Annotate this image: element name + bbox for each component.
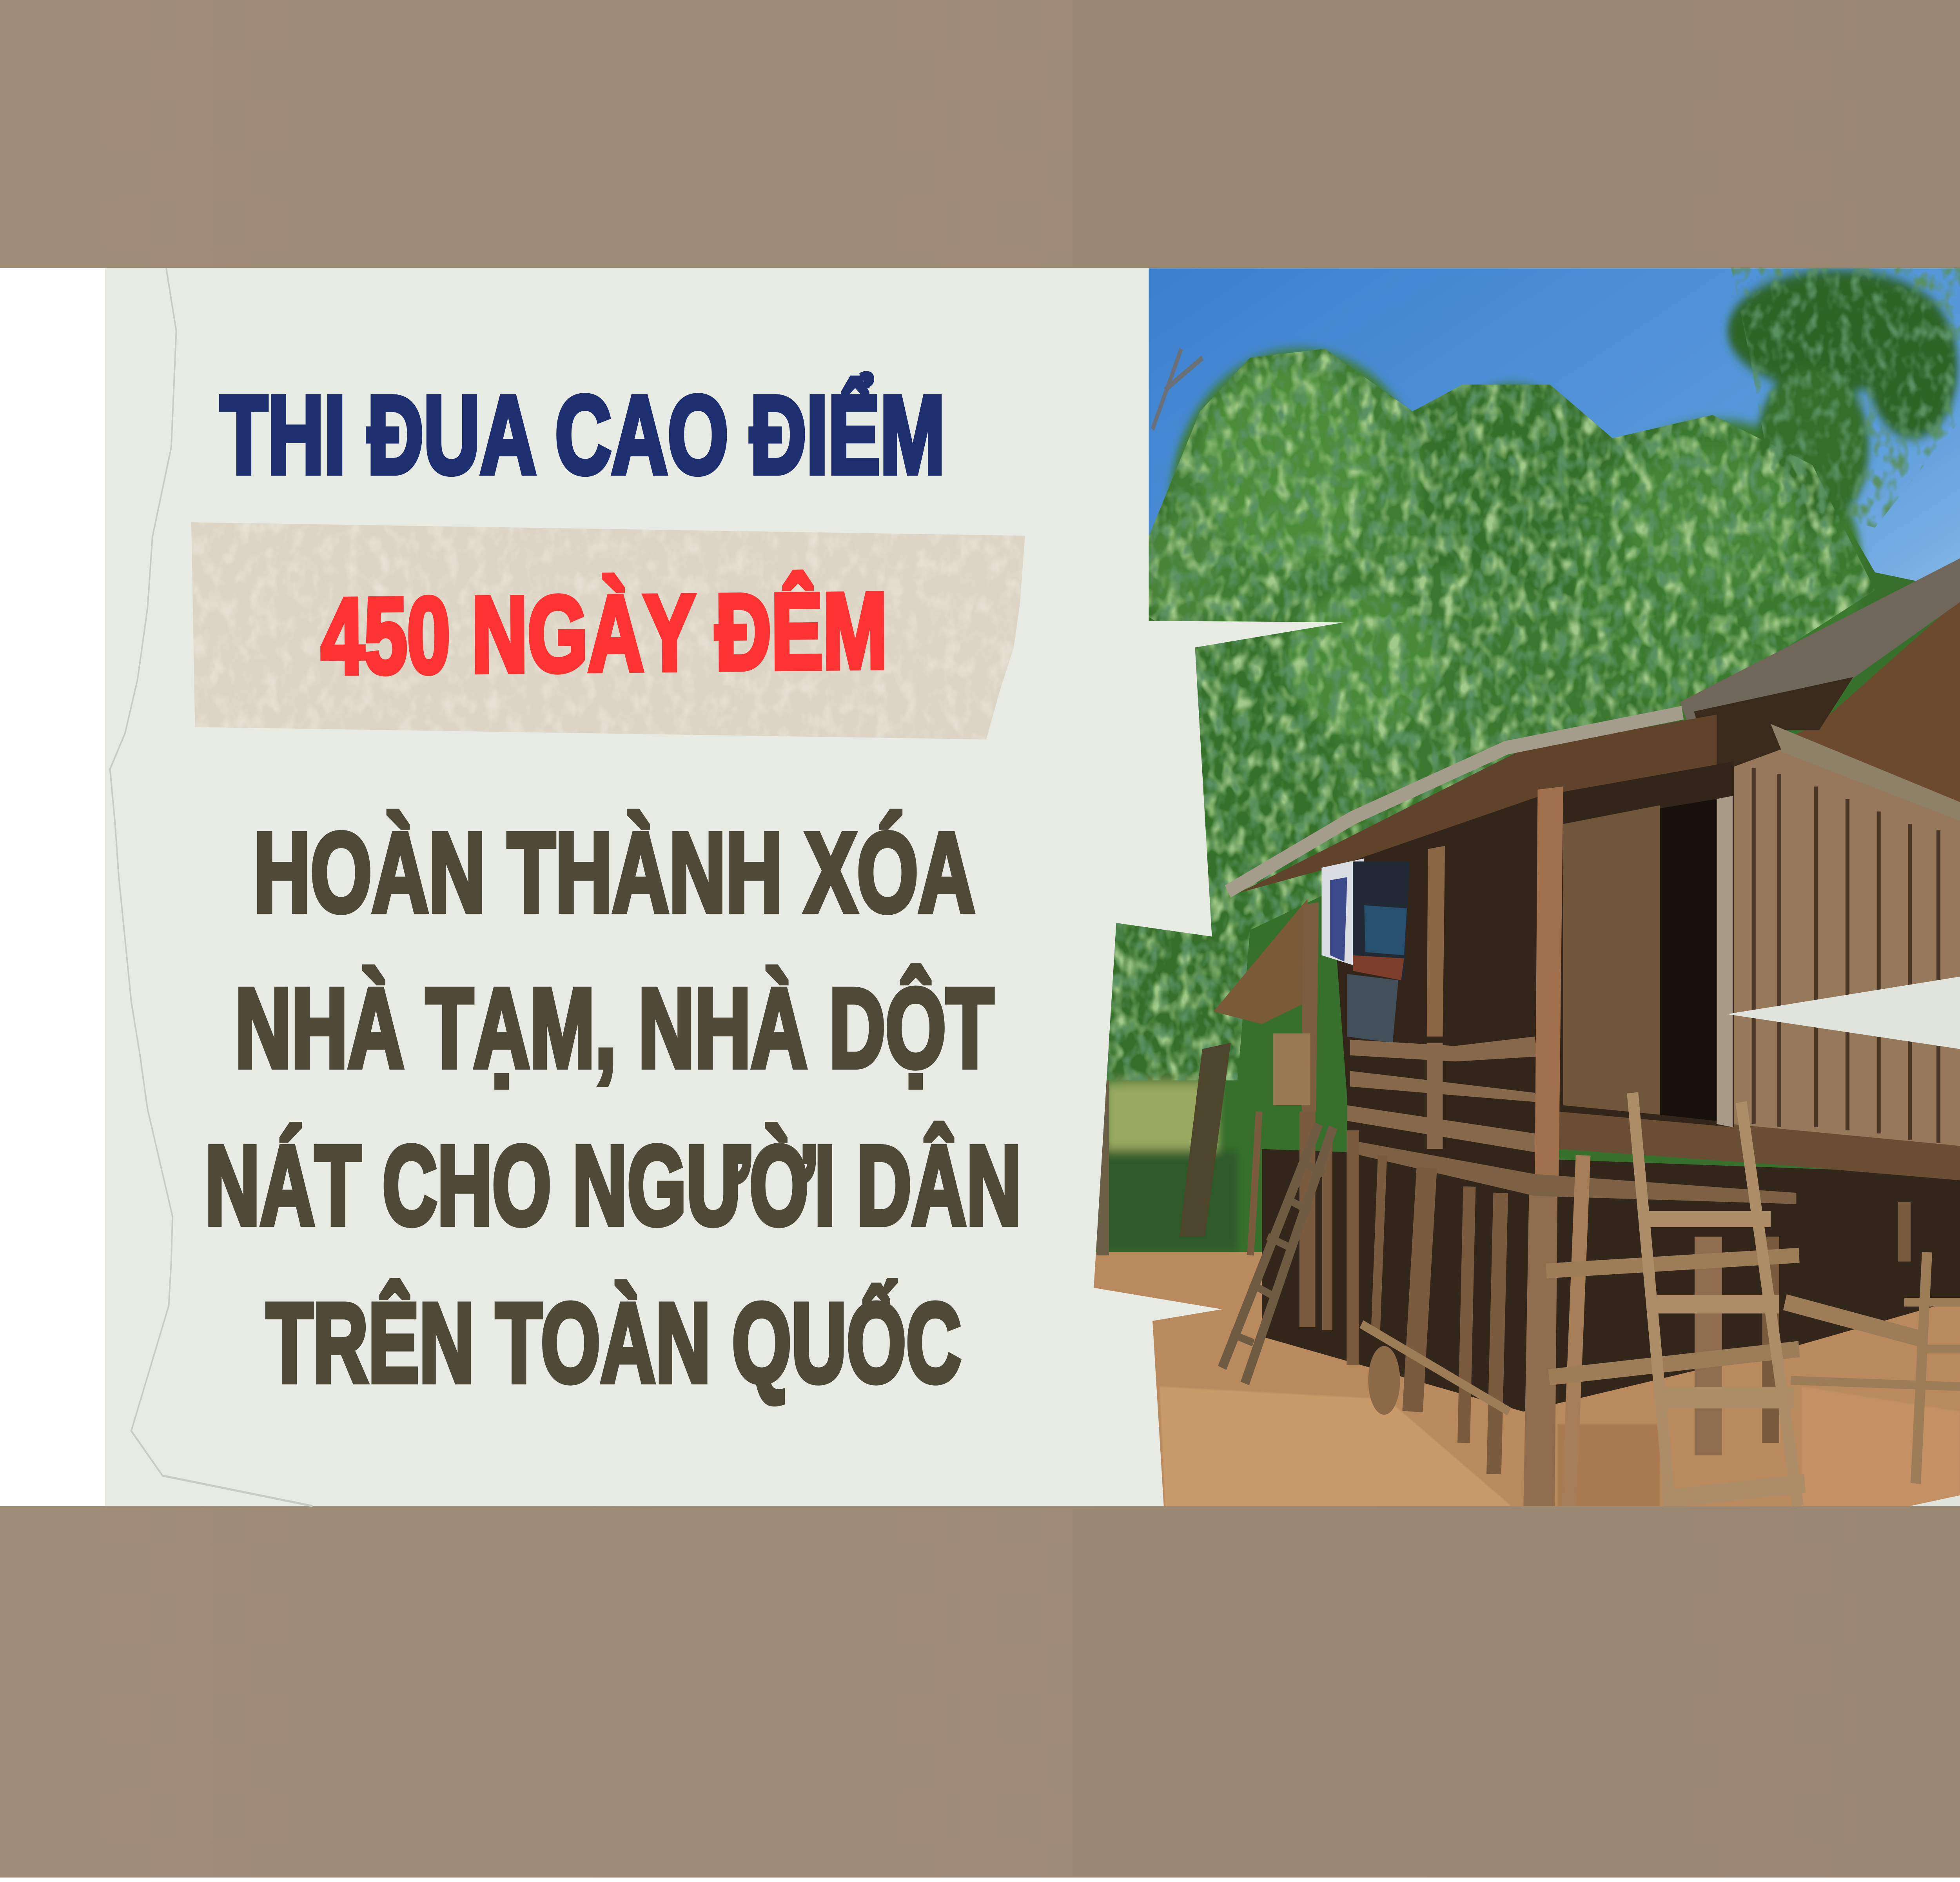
porch wall and door	[1563, 805, 1660, 1115]
tree base	[1094, 349, 1960, 1252]
house drawing	[1103, 558, 1960, 1507]
floor beam	[1557, 1112, 1960, 1180]
line 2: NHÀ TẠM, NHÀ DỘT	[235, 965, 994, 1091]
doorway	[1660, 799, 1717, 1121]
trees	[1100, 270, 1958, 1252]
photo: stilt house	[1094, 268, 1960, 1507]
heading: 450 ngay dem: 450 NGÀY ĐÊM	[321, 571, 887, 697]
left ladder	[1222, 1124, 1333, 1384]
line 3: NÁT CHO NGƯỜI DÂN	[205, 1123, 1021, 1248]
gable thatch	[1791, 599, 1960, 805]
porch floor	[1347, 1140, 1796, 1204]
right stairs	[1633, 1093, 1805, 1505]
stilts	[1103, 1080, 1904, 1507]
left posts	[1302, 902, 1319, 1112]
top band	[0, 0, 1960, 268]
roof shadow	[1694, 677, 1853, 774]
rails and logs	[1361, 1252, 1960, 1484]
ground	[1094, 1252, 1960, 1506]
top-right foliage texture	[1731, 268, 1960, 528]
paper wedge right	[1727, 977, 1960, 1049]
tape texture	[191, 522, 1025, 739]
line 4: TRÊN TOÀN QUỐC	[266, 1280, 961, 1406]
right wall	[1731, 749, 1960, 1162]
corrugated edge	[1228, 713, 1682, 892]
tape strip	[191, 522, 1025, 739]
bare branch	[1152, 349, 1203, 429]
porch interior	[1330, 761, 1734, 1174]
dark underfloor	[1262, 1149, 1960, 1412]
railing	[1347, 1037, 1538, 1152]
door post	[1717, 796, 1733, 1127]
foliage shadows	[1106, 349, 1875, 1080]
crate	[1273, 1034, 1310, 1105]
dog	[1368, 1346, 1400, 1415]
main post	[1535, 787, 1563, 1177]
lower post	[1523, 1186, 1557, 1507]
foliage highlights	[1106, 349, 1875, 1080]
paper sheet	[105, 268, 1344, 1506]
panel: torn paper	[105, 268, 1960, 1506]
line 1: HOÀN THÀNH XÓA	[254, 810, 975, 936]
torn edge	[110, 268, 312, 1506]
tree trunk	[1180, 1043, 1230, 1237]
thatch lean-to	[1214, 899, 1313, 1024]
wall planks	[1754, 768, 1938, 1143]
heading: thi dua cao diem: THI ĐUA CAO ĐIỂM	[220, 372, 945, 497]
clothes	[1321, 858, 1410, 1043]
sky	[1149, 268, 1960, 805]
ground lights	[1160, 1386, 1960, 1507]
roof underside	[1239, 715, 1717, 893]
lower eave	[1771, 724, 1960, 821]
bottom band	[0, 1506, 1960, 1878]
upper metal roof	[1680, 558, 1960, 724]
main text	[205, 810, 1021, 1406]
paper corner	[1910, 1495, 1960, 1506]
